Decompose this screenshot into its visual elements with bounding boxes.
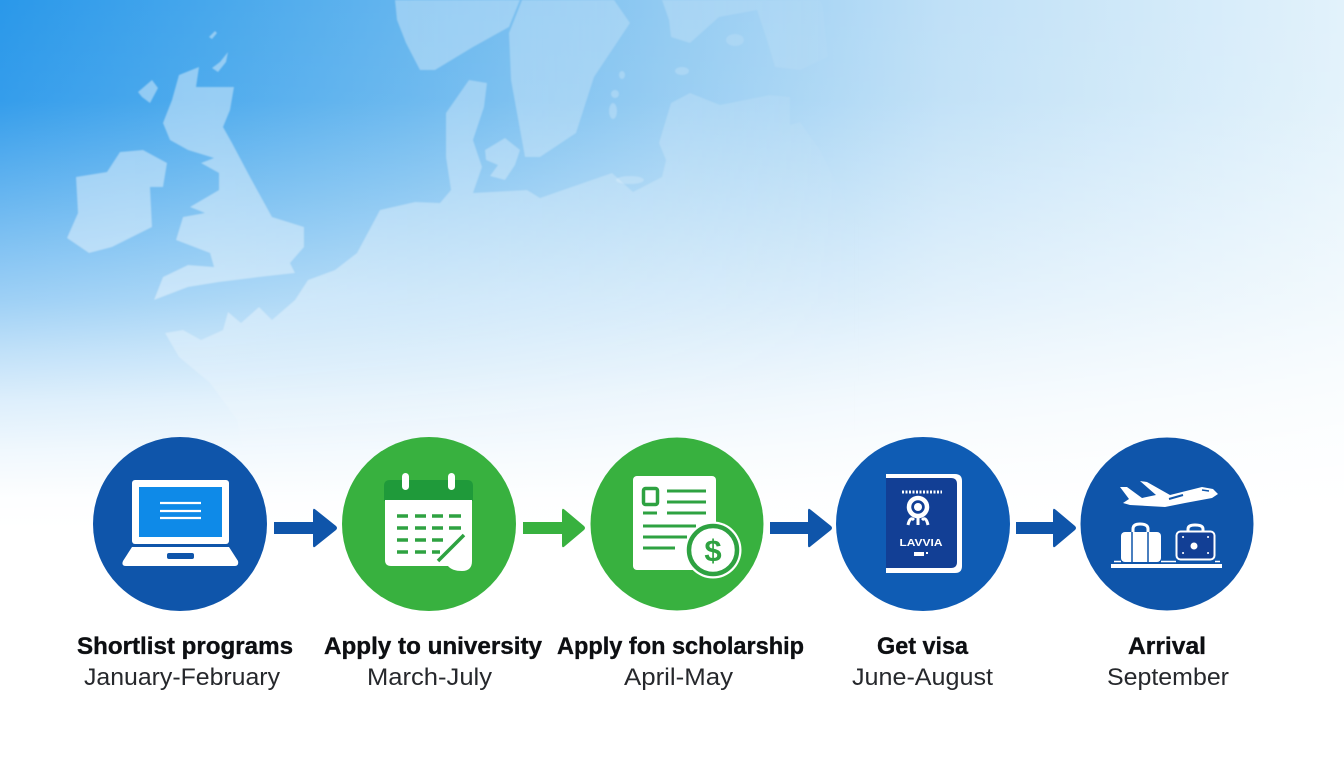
icon: laptop [122,480,238,566]
icon: document with coin: $ [704,533,722,568]
circle: step 1 [93,437,267,611]
circle: step 3 [590,438,764,610]
label: step 4 title: Get visa [877,633,969,660]
step 5: arrival [1080,438,1254,691]
label: step 5 dates: September [1107,664,1229,691]
label: step 2 dates: March-July [367,664,492,691]
icon: airplane [1120,481,1218,507]
label: step 3 title: Apply fon scholarship [557,633,804,660]
background map of northern Europe [66,0,774,378]
circle: step 2 [342,437,516,611]
background: white fade toward the bottom [0,0,1344,530]
label: step 4 dates: June-August [852,664,993,691]
arrow: step 4 to step 5 [1016,509,1076,547]
label: step 1 title: Shortlist programs [77,633,293,660]
icon: passport [886,474,962,573]
arrow: step 3 to step 4 [770,509,832,547]
circle: step 5 [1080,438,1254,610]
icon: passport: LAVVIA [900,537,943,549]
label: step 1 dates: January-February [84,664,280,691]
step 1: shortlist programs [77,437,293,691]
circle: step 4 [836,437,1010,611]
icon: calendar [384,473,473,571]
icon: document with coin [633,476,742,578]
arrow: step 2 to step 3 [523,509,585,547]
step 3: apply for scholarship [557,438,804,691]
label: step 5 title: Arrival [1128,633,1206,660]
label: step 2 title: Apply to university [324,633,543,660]
label: step 3 dates: April-May [624,664,733,691]
arrow: step 1 to step 2 [274,509,337,547]
step 2: apply to university [324,437,543,691]
icon: luggage on conveyor [1111,524,1222,568]
step 4: get visa [836,437,1010,691]
